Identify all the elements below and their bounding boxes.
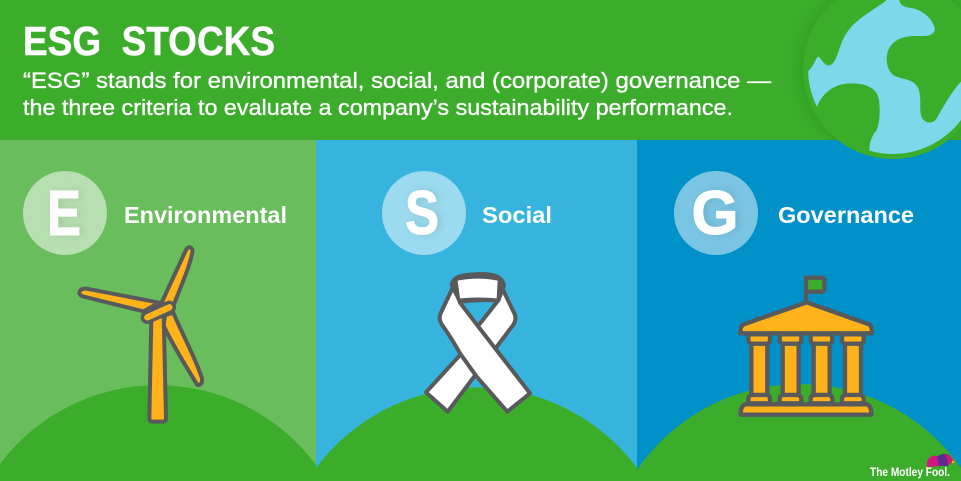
title: ESG STOCKS [23,18,275,64]
base [741,404,871,415]
badge: G [674,171,758,255]
jester hat [926,454,954,469]
header band [0,0,961,140]
roof [740,302,872,333]
icon: awareness ribbon [426,274,530,412]
badge: S: S [405,179,439,248]
columns [748,334,864,403]
icon: wind turbine [79,247,202,422]
subtitle: “ESG” stands for environmental, social, and (corporate) governance — [23,68,771,93]
flag [806,278,824,302]
label: Social: Social [482,202,552,228]
badge: S [382,171,466,255]
subtitle: the three criteria to evaluate a company’s sustainability performance. [23,95,733,120]
label: Environmental: Environmental [124,202,287,228]
label: Governance: Governance [778,202,914,228]
green hills [0,384,961,481]
icon: globe [799,0,961,161]
logo: The Motley Fool [870,454,954,479]
logo: The Motley Fool: The Motley Fool. [870,467,950,479]
subtitle [23,68,771,120]
badge: E [23,171,107,255]
badge: E: E [47,177,81,249]
panel: social [316,140,637,481]
panel: governance [637,140,961,481]
badge: G: G [692,179,738,248]
icon: government building [740,278,872,415]
panel: environmental [0,140,316,481]
